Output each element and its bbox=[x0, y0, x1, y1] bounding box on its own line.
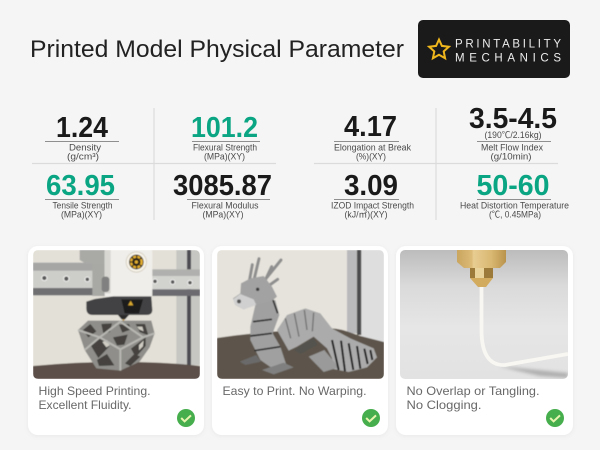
metric: flexural strength: (MPa)(XY) bbox=[204, 152, 245, 162]
metric: flexural modulus: Flexural Modulus bbox=[192, 200, 259, 210]
icon: star bbox=[429, 40, 449, 58]
photo: nozzle extruding filament bbox=[400, 250, 568, 379]
panel: parameters right bbox=[314, 103, 569, 220]
metric: tensile strength: (MPa)(XY) bbox=[61, 210, 102, 220]
caption: Excellent Fluidity. bbox=[38, 399, 132, 412]
metric: density bbox=[45, 112, 119, 162]
metric: flexural strength: 101.2 bbox=[191, 112, 258, 144]
metric: melt flow index: (g/10min) bbox=[490, 152, 532, 162]
title: Printed Model Physical Parameter bbox=[30, 36, 404, 63]
metric: flexural strength bbox=[191, 112, 260, 162]
metric: heat distortion temperature bbox=[460, 170, 569, 220]
caption: High Speed Printing. bbox=[38, 385, 150, 398]
badge text bbox=[455, 38, 561, 64]
icon: check bbox=[546, 409, 564, 427]
metric: tensile strength bbox=[45, 170, 119, 220]
metric: melt flow index bbox=[469, 103, 557, 162]
badge: printability mechanics bbox=[418, 20, 570, 78]
metric: tensile strength: Tensile Strength bbox=[52, 200, 112, 210]
badge text: MECHANICS bbox=[455, 52, 561, 64]
metric: heat distortion temperature: 50-60 bbox=[476, 170, 550, 202]
lattice model bbox=[78, 321, 155, 371]
metric: melt flow index: (190℃/2.16kg) bbox=[484, 130, 542, 140]
icon: check bbox=[362, 409, 380, 427]
metric: izod impact strength: (kJ/㎡)(XY) bbox=[344, 210, 388, 220]
metric: flexural modulus: 3085.87 bbox=[173, 170, 272, 202]
caption bbox=[38, 385, 150, 412]
metric: density: 1.24 bbox=[56, 112, 108, 144]
metric: heat distortion temperature: (℃, 0.45MPa) bbox=[489, 210, 541, 220]
metric: heat distortion temperature: Heat Distortion Temperature bbox=[460, 200, 569, 210]
panel: high speed printing bbox=[28, 246, 204, 435]
metric: izod impact strength bbox=[331, 170, 414, 220]
metric: elongation at break bbox=[334, 111, 411, 162]
metric: density: Density bbox=[69, 142, 102, 152]
panel: no overlap or tangling bbox=[396, 246, 573, 435]
icon: check bbox=[177, 409, 195, 427]
metric: flexural modulus: (MPa)(XY) bbox=[202, 210, 244, 220]
caption: No Overlap or Tangling. bbox=[406, 385, 540, 398]
metric: elongation at break: Elongation at Break bbox=[334, 142, 411, 152]
metric: melt flow index: Melt Flow Index bbox=[481, 142, 543, 152]
dragon bbox=[233, 259, 377, 374]
metric: flexural strength: Flexural Strength bbox=[193, 142, 257, 152]
metric: izod impact strength: 3.09 bbox=[344, 170, 398, 202]
panel: parameters left bbox=[32, 108, 276, 220]
metric: tensile strength: 63.95 bbox=[46, 170, 115, 202]
caption: No Clogging. bbox=[406, 399, 482, 412]
caption bbox=[406, 385, 540, 412]
metric: flexural modulus bbox=[173, 170, 272, 220]
panel: easy to print bbox=[212, 246, 388, 435]
metric: density: (g/cm³) bbox=[67, 152, 99, 162]
metric: elongation at break: (%)(XY) bbox=[356, 152, 386, 162]
metric: melt flow index: 3.5-4.5 bbox=[469, 103, 557, 135]
caption: Easy to Print. No Warping. bbox=[222, 385, 366, 398]
photo: printer head and lattice model bbox=[33, 250, 200, 379]
metric: izod impact strength: IZOD Impact Strength bbox=[331, 200, 414, 210]
photo: articulated dragon bbox=[217, 250, 384, 379]
badge text: PRINTABILITY bbox=[455, 38, 561, 50]
metric: elongation at break: 4.17 bbox=[344, 111, 397, 143]
